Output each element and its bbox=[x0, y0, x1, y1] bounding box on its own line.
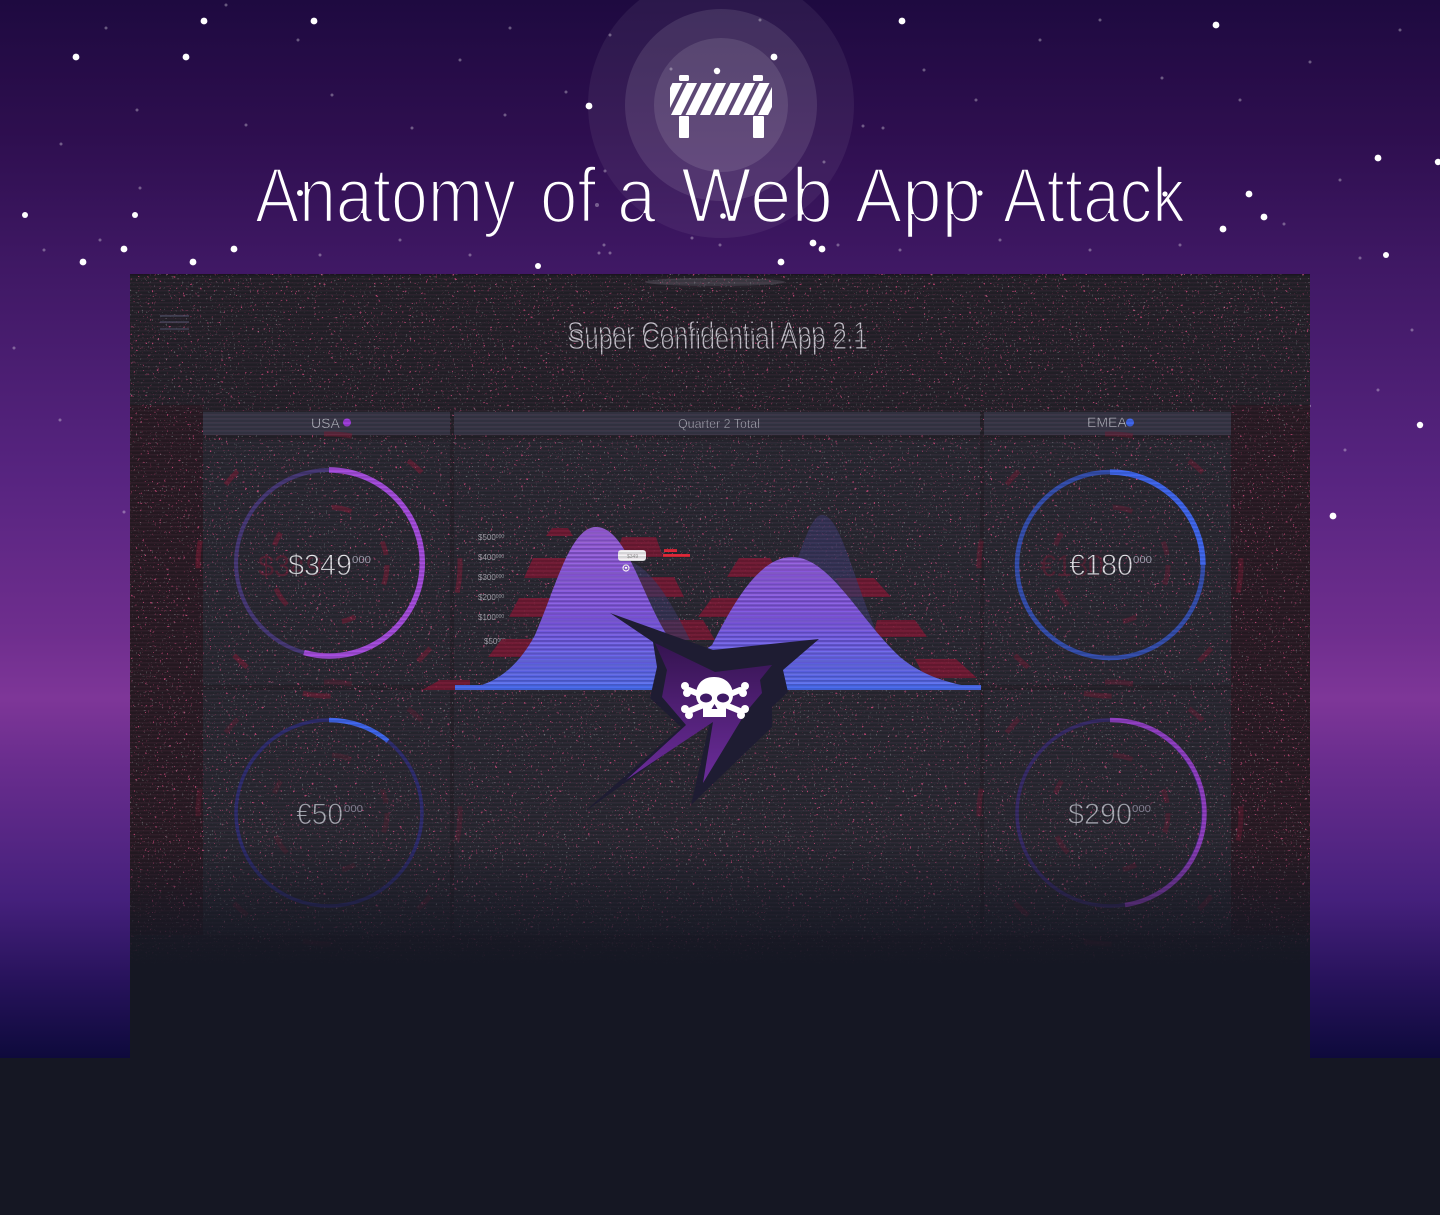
crossbones bbox=[689, 690, 740, 711]
y axis labels: $100 bbox=[478, 613, 496, 622]
title: Web bbox=[681, 151, 833, 239]
gauge: $290,000: $290 bbox=[1068, 798, 1132, 831]
gauge: EMEA €180,000: 000 bbox=[1133, 555, 1152, 566]
gauge: USA $349,000: 000 bbox=[352, 555, 371, 566]
header bar: Quarter 2 Total: Quarter 2 Total bbox=[678, 416, 760, 431]
header bar: USA bbox=[203, 412, 450, 435]
red glitch tag bbox=[663, 549, 690, 557]
icon: road barrier in concentric halos bbox=[588, 0, 854, 238]
header bar: USA: USA bbox=[311, 415, 340, 431]
title: Attack bbox=[1003, 151, 1186, 239]
area chart bbox=[422, 515, 981, 690]
tooltip bbox=[618, 550, 646, 571]
y axis labels: $400 bbox=[478, 553, 496, 562]
y axis labels: 000 bbox=[496, 614, 504, 620]
icon: attack burst with skull and crossbones bbox=[583, 613, 819, 813]
y axis labels: $50 bbox=[484, 637, 497, 646]
header bar: Quarter 2 Total bbox=[454, 412, 980, 435]
y axis labels: $200 bbox=[478, 593, 496, 602]
gauge: $290,000 bbox=[1017, 720, 1204, 906]
muted ghost peaks bbox=[770, 515, 885, 650]
y axis labels: 000 bbox=[496, 574, 504, 580]
gauge: EMEA €180,000 bbox=[1017, 472, 1203, 658]
scanlines bbox=[130, 274, 1310, 1058]
title: of bbox=[540, 151, 596, 239]
gauge: €50,000 bbox=[236, 720, 422, 906]
glitch red ghost steps bbox=[422, 528, 977, 690]
gutters bbox=[130, 405, 203, 935]
glitch noise bbox=[130, 274, 1310, 1058]
gauge: €50,000: 000 bbox=[344, 804, 363, 815]
dark footer band bbox=[0, 1058, 1440, 1215]
header bar: EMEA: EMEA bbox=[1087, 414, 1127, 430]
title: App bbox=[855, 151, 981, 239]
gauge: USA $349,000: $349 bbox=[258, 550, 322, 583]
title: a bbox=[617, 151, 657, 239]
y axis labels: $500 bbox=[478, 533, 496, 542]
gauge: $290,000: 000 bbox=[1132, 804, 1151, 815]
y axis labels: 000 bbox=[497, 638, 506, 644]
panel: compromised app window bbox=[130, 274, 1310, 1058]
title: Anatomy bbox=[255, 151, 516, 239]
title bbox=[256, 166, 1183, 237]
app heading with glitch double: Super Confidential App 2.1 bbox=[568, 324, 868, 356]
main hills bbox=[455, 527, 981, 690]
gauge: EMEA €180,000: €180 bbox=[1069, 549, 1133, 582]
tooltip: $349 bbox=[627, 554, 638, 560]
faint stars bbox=[12, 4, 1414, 514]
y axis labels: 000 bbox=[496, 554, 504, 560]
app heading with glitch double: Super Confidential App 2.1 bbox=[567, 317, 867, 349]
y axis labels bbox=[478, 533, 506, 646]
bright stars bbox=[22, 18, 1440, 519]
panel grid cells bbox=[203, 440, 1231, 935]
bottom fade bbox=[130, 840, 1310, 1058]
y axis labels: $300 bbox=[478, 573, 496, 582]
y axis labels: 000 bbox=[496, 534, 504, 540]
skull bbox=[696, 677, 733, 717]
header bar: EMEA bbox=[984, 412, 1231, 435]
gauge: €50,000: €50 bbox=[296, 798, 343, 831]
gauge: USA $349,000 bbox=[236, 470, 422, 656]
y axis labels: 000 bbox=[496, 594, 504, 600]
menu icon bbox=[160, 316, 189, 329]
glitch ghost rings bbox=[198, 434, 1241, 944]
gauge: EMEA €180,000: €180 bbox=[1040, 550, 1104, 583]
gauge: USA $349,000: $349 bbox=[288, 549, 352, 582]
